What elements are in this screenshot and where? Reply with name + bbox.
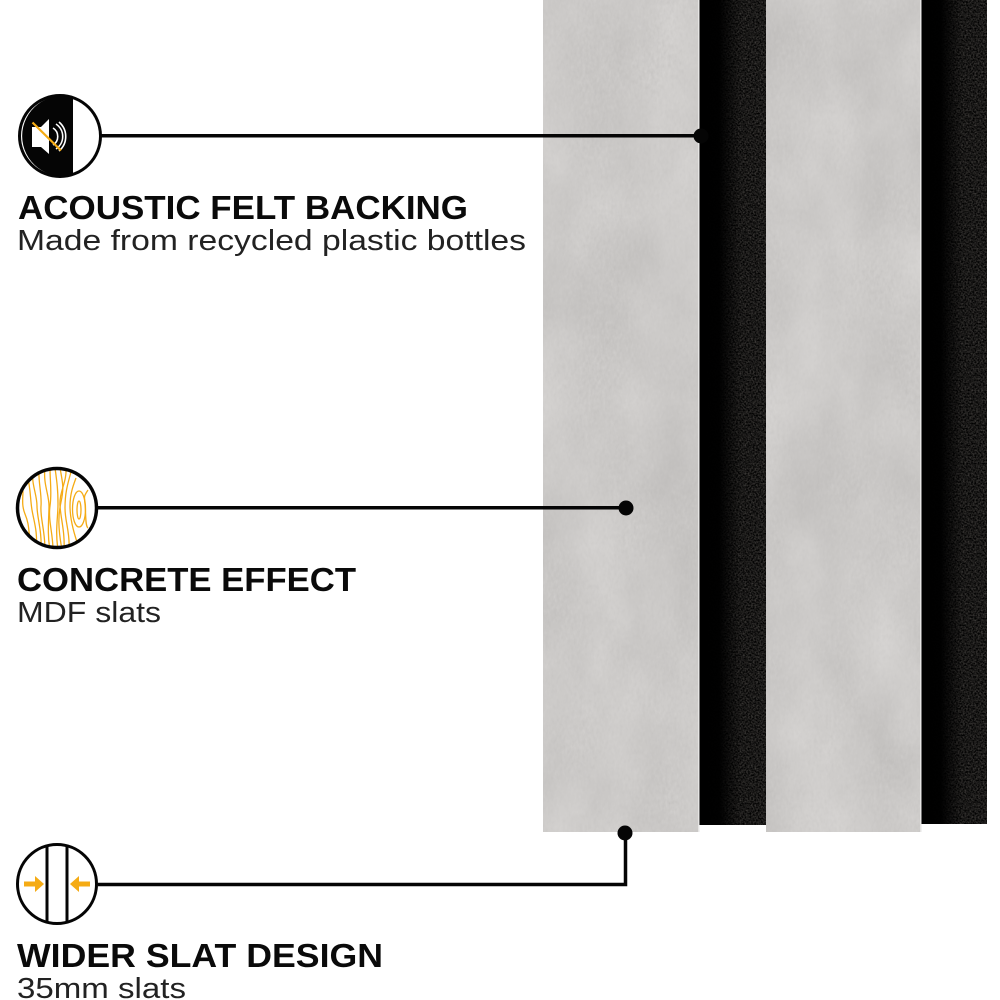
- heading: concrete effect: CONCRETE EFFECT: [17, 561, 356, 598]
- callout: concrete effect: [17, 468, 634, 629]
- icon: slat width arrows: [18, 844, 96, 924]
- text: MDF slats: MDF slats: [17, 597, 161, 629]
- leader line: wider slat: [98, 826, 632, 884]
- concrete slat 1: [543, 0, 700, 832]
- icon: wood grain: [18, 468, 96, 550]
- leader line: acoustic felt: [100, 128, 708, 144]
- felt backing strip 2: [921, 0, 987, 824]
- icon: muted speaker: [20, 96, 100, 176]
- callout: acoustic felt backing: [17, 96, 708, 257]
- felt backing strip 1: [699, 0, 766, 825]
- text: recycled plastic bottles: Made from recycled plastic bottles: [17, 225, 526, 257]
- leader line: concrete effect: [97, 500, 634, 516]
- heading: acoustic felt backing: ACOUSTIC FELT BACKING: [18, 189, 468, 226]
- heading: wider slat design: WIDER SLAT DESIGN: [17, 937, 383, 974]
- callout: wider slat design: [17, 826, 632, 1000]
- concrete slat 2: [766, 0, 922, 832]
